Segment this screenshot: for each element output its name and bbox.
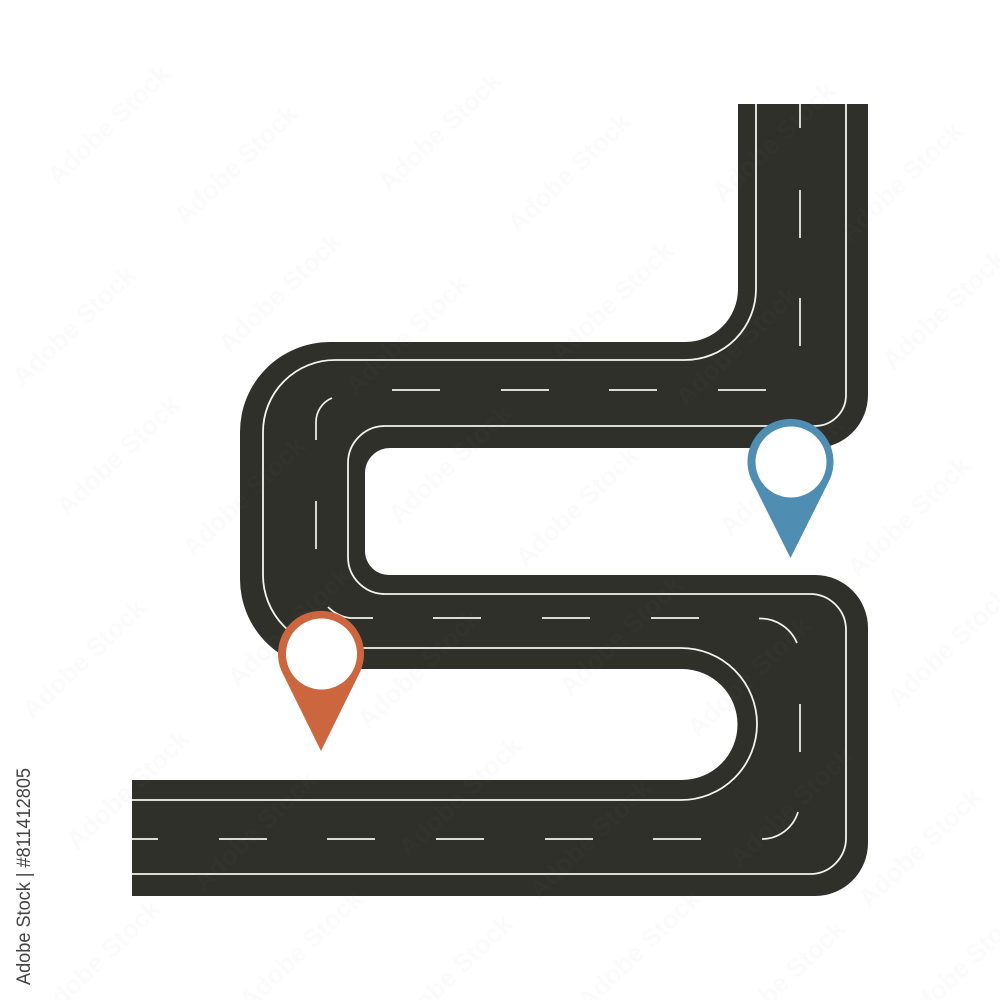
- watermark pattern: Adobe Stock: [501, 106, 637, 239]
- watermark pattern: Adobe Stock: [339, 268, 475, 401]
- watermark pattern: Adobe Stock: [553, 569, 689, 702]
- road edge line: inner: [132, 104, 757, 800]
- watermark pattern: Adobe Stock: [50, 389, 186, 522]
- winding road: [132, 104, 868, 896]
- watermark pattern: Adobe Stock: [168, 98, 304, 231]
- watermark pattern: Adobe Stock: [351, 602, 487, 735]
- watermark pattern: Adobe Stock: [852, 781, 988, 914]
- watermark pattern: Adobe Stock: [669, 279, 805, 412]
- watermark pattern: Adobe Stock: [706, 75, 842, 208]
- watermark pattern: Adobe Stock: [16, 592, 152, 725]
- watermark pattern: Adobe Stock: [372, 65, 508, 198]
- watermark pattern: Adobe Stock: [6, 259, 142, 392]
- watermark pattern: Adobe Stock: [187, 764, 323, 897]
- icon: orange location pin: [278, 611, 364, 751]
- watermark pattern: Adobe Stock: [841, 450, 977, 583]
- road edge line: outer: [132, 104, 846, 874]
- watermark pattern: Adobe Stock: [212, 226, 348, 359]
- road surface: [132, 104, 868, 896]
- watermark pattern: Adobe Stock: [509, 440, 645, 573]
- road centre dashes: [132, 104, 800, 839]
- watermark pattern: Adobe Stock: [681, 610, 817, 743]
- watermark pattern: Adobe Stock: [60, 723, 196, 856]
- watermark pattern: Adobe Stock: [723, 740, 859, 873]
- watermark pattern: Adobe Stock: [41, 58, 177, 191]
- watermark pattern: Adobe Stock: [544, 235, 680, 368]
- icon: blue location pin: [748, 419, 834, 558]
- watermark pattern: Adobe Stock: [176, 430, 312, 563]
- watermark pattern: Adobe Stock: [833, 115, 969, 248]
- watermark pattern: Adobe Stock: [522, 772, 658, 905]
- watermark pattern: Adobe Stock: [392, 730, 528, 863]
- watermark pattern: Adobe Stock: [713, 409, 849, 542]
- watermark pattern: Adobe Stock: [382, 397, 518, 530]
- stock image credit: Adobe Stock | #811412805: [14, 768, 35, 985]
- watermark pattern: Adobe Stock: [221, 560, 357, 693]
